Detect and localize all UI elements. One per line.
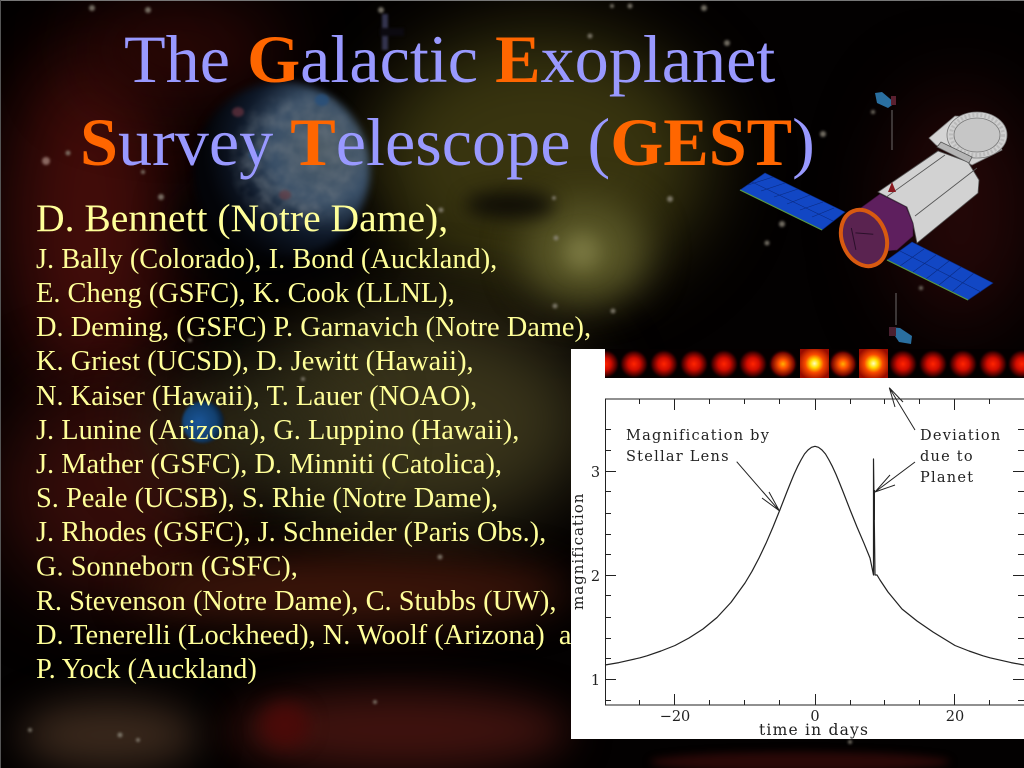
annotation: magnification by stellar lens: Stellar Lens [626,449,730,465]
magnification curve with planet spike [605,446,1024,665]
arrow to strip deviation [889,388,915,430]
x axis title: time in days [759,721,869,739]
y axis tick labels: 3 [591,465,600,481]
annotation: magnification by stellar lens: Magnification by [626,428,770,444]
GEST spacecraft illustration [740,92,1007,344]
annotation: deviation due to planet [920,428,1001,486]
x axis tick labels: 20 [946,709,964,725]
arrow to stellar lens curve [737,462,779,511]
y axis tick labels [591,465,600,689]
title line 1: The Galactic Exoplanet [124,21,775,97]
solar panel left [740,173,845,230]
co-authors: R. Stevenson (Notre Dame), C. Stubbs (UW), [36,586,556,617]
y axis tick labels: 2 [591,569,600,585]
title line 2: Survey Telescope (GEST) [80,104,815,180]
co-authors: K. Griest (UCSD), D. Jewitt (Hawaii), [36,346,474,377]
annotation: deviation due to planet: Deviation [920,428,1001,444]
co-authors [36,244,600,685]
co-authors: J. Bally (Colorado), I. Bond (Auckland), [36,244,497,275]
blue moon [182,401,224,443]
co-authors: E. Cheng (GSFC), K. Cook (LLNL), [36,278,455,309]
co-authors: D. Deming, (GSFC) P. Garnavich (Notre Dame), [36,312,591,343]
x axis tick labels: 0 [810,709,820,725]
white panel [571,349,1024,739]
co-authors: P. Yock (Auckland) [36,654,257,685]
aperture ring [833,203,895,273]
y axis tick labels: 1 [591,673,600,689]
arrow to curve deviation [875,462,915,492]
distant satellite silhouette [380,14,404,50]
co-authors: J. Lunine (Arizona), G. Luppino (Hawaii), [36,415,519,446]
chart axes [605,399,1024,705]
author list [36,196,600,685]
planet [194,82,376,258]
annotation: deviation due to planet: due to [920,449,974,465]
co-authors: G. Sonneborn (GSFC), [36,552,298,582]
co-authors: N. Kaiser (Hawaii), T. Lauer (NOAO), [36,381,477,412]
light curve image strip [590,349,1024,379]
annotation: deviation due to planet: Planet [920,470,974,486]
annotation: magnification by stellar lens [626,428,770,465]
co-authors: J. Rhodes (GSFC), J. Schneider (Paris Obs.), [36,517,546,548]
co-authors: D. Tenerelli (Lockheed), N. Woolf (Arizona) and [36,620,600,651]
title [80,21,815,180]
sunshade lid [929,112,1007,165]
telescope tube [878,142,979,243]
co-authors: J. Mather (GSFC), D. Minniti (Catolica), [36,449,502,480]
solar panel right [887,242,993,300]
x axis tick labels: −20 [660,709,690,725]
microlensing figure panel [569,349,1024,739]
marker on tube [888,182,896,192]
x axis tick labels [660,709,964,725]
probe top [875,92,896,150]
lead author: D. Bennett (Notre Dame), [36,196,448,240]
co-authors: S. Peale (UCSB), S. Rhie (Notre Dame), [36,483,498,514]
probe bottom [889,293,912,344]
spacecraft bus [858,194,913,252]
y axis title: magnification [569,493,587,610]
